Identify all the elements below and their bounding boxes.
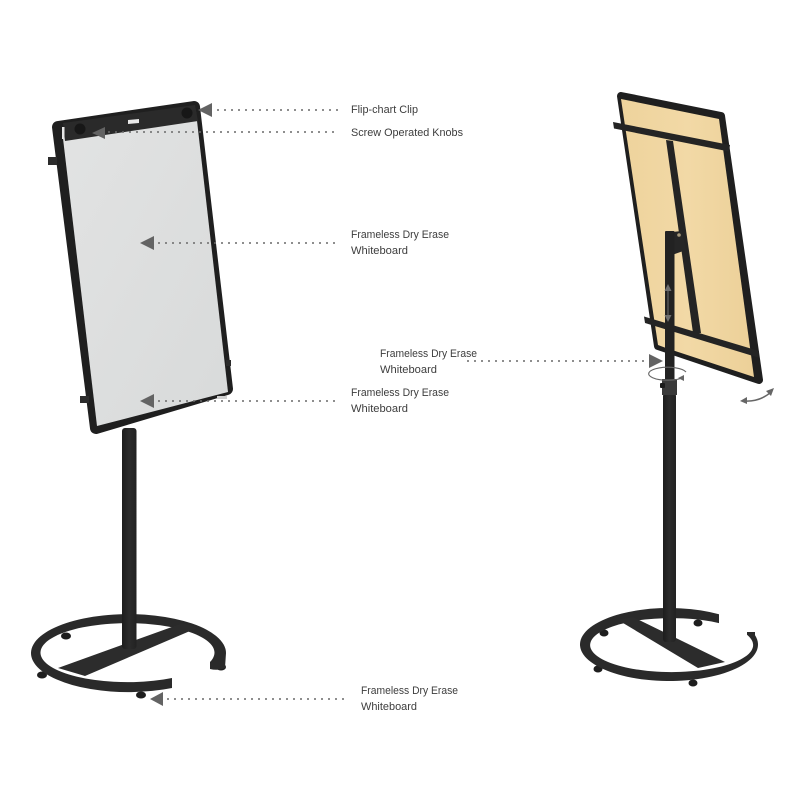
pole bracket	[672, 231, 686, 255]
callout: frameless dry erase whiteboard, upper	[140, 229, 449, 257]
left board side tabs	[48, 157, 231, 403]
right stand: back view	[580, 96, 774, 686]
right board frame	[621, 96, 759, 380]
left stand feet	[37, 632, 226, 698]
right stand feet	[594, 620, 702, 686]
height collar	[660, 379, 677, 395]
callout: flip-chart clip: Flip-chart Clip	[351, 104, 418, 116]
callout: frameless dry erase whiteboard, upper: Whiteboard	[351, 245, 408, 257]
left stand ring base	[31, 614, 226, 692]
callout: frameless dry erase whiteboard, right stand: Frameless Dry Erase	[380, 348, 477, 360]
right stand crossbar	[618, 617, 725, 668]
callout: frameless dry erase whiteboard, base: Whiteboard	[361, 701, 417, 713]
callout: screw operated knobs	[92, 127, 463, 139]
left stand: front view	[31, 105, 231, 698]
callout: frameless dry erase whiteboard, base	[150, 685, 458, 713]
right board upper rail	[613, 122, 730, 152]
left stand pole	[122, 428, 136, 649]
callout: frameless dry erase whiteboard, base: Frameless Dry Erase	[361, 685, 458, 697]
rotation arrow	[649, 367, 686, 381]
callout: frameless dry erase whiteboard, right stand: Whiteboard	[380, 364, 437, 376]
height adjustment arrow	[664, 284, 672, 322]
right board lower rail	[644, 316, 759, 358]
callout: flip-chart clip	[198, 103, 418, 117]
callout: frameless dry erase whiteboard, right stand	[380, 348, 663, 376]
callout: frameless dry erase whiteboard, lower: Frameless Dry Erase	[351, 387, 449, 399]
left whiteboard frame	[58, 107, 227, 428]
callout: screw operated knobs: Screw Operated Knobs	[351, 127, 463, 139]
callout: frameless dry erase whiteboard, lower	[140, 387, 449, 415]
flip-chart clip bar	[62, 105, 198, 141]
callout: frameless dry erase whiteboard, lower: Whiteboard	[351, 403, 408, 415]
tilt arrow	[740, 388, 774, 404]
left stand crossbar	[58, 623, 197, 676]
right stand ring base	[580, 608, 758, 681]
right stand upper pole	[665, 231, 674, 381]
right stand lower pole	[663, 393, 676, 642]
callout: frameless dry erase whiteboard, upper: Frameless Dry Erase	[351, 229, 449, 241]
right board spine	[666, 140, 701, 333]
left whiteboard surface	[62, 112, 228, 426]
right board wood back	[621, 99, 754, 377]
